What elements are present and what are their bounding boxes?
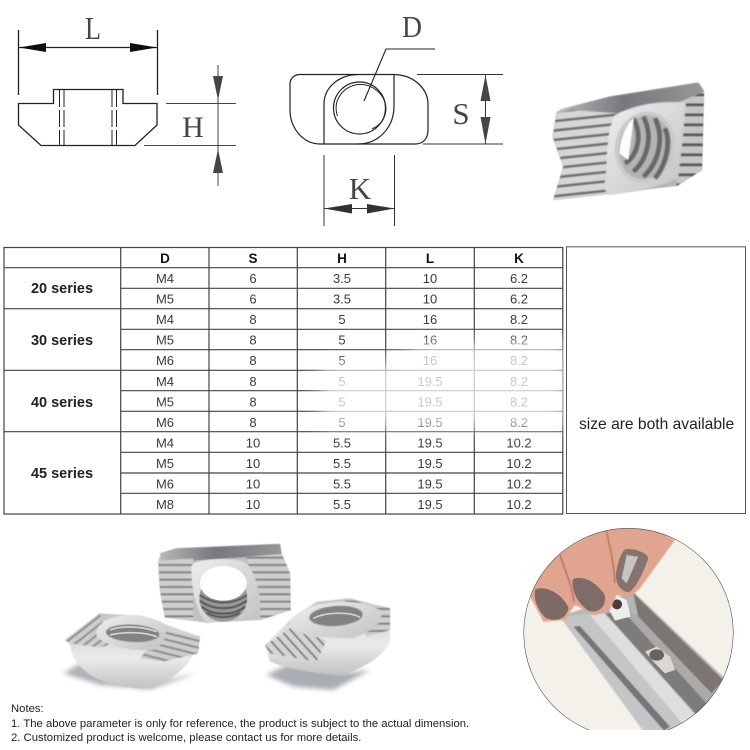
column L values: 10 (423, 271, 437, 286)
notes text block: 2. Customized product is welcome, please contact us for more details. (11, 732, 361, 744)
nut silhouette base (553, 83, 704, 200)
column K values: 10.2 (506, 436, 532, 450)
column K values: 10.2 (506, 476, 532, 492)
washed-out watermark area (320, 342, 566, 428)
table grid lines (4, 248, 563, 514)
series labels: 30 series (31, 333, 93, 349)
column D values: M4 (156, 312, 174, 327)
column D values: M5 (156, 456, 174, 471)
cast shadows (63, 663, 370, 690)
series labels: 40 series (31, 395, 93, 411)
column S values (246, 271, 260, 512)
dimension L: L (85, 10, 101, 46)
specification table (4, 248, 566, 514)
column H values: 5 (338, 312, 346, 327)
column S values: 10 (246, 476, 260, 492)
column K values (506, 271, 532, 512)
column S values: 6 (249, 271, 257, 286)
photo: single T-nut close-up (553, 83, 704, 200)
column L values: 16 (423, 353, 437, 368)
column L values: 19.5 (417, 415, 443, 430)
photo: fingers inserting T-nut in rail, circular crop (524, 528, 734, 730)
column D values: M6 (156, 353, 174, 368)
table header row: D (160, 251, 170, 266)
notes text block: Notes: (11, 703, 44, 715)
column K values: 10.2 (506, 456, 532, 471)
left nut (65, 613, 200, 688)
center flat plate (605, 102, 686, 195)
table header row: L (426, 251, 434, 266)
table header row: K (514, 251, 524, 266)
column S values: 8 (249, 332, 257, 348)
dimension S (417, 74, 503, 144)
nut left knurled flank (553, 110, 620, 200)
column H values: 5 (338, 394, 346, 410)
nut right knurled flank (673, 92, 704, 186)
column D values: M5 (156, 292, 174, 306)
column H values: 5 (338, 353, 346, 368)
column K values: 8.2 (510, 374, 528, 389)
column D values: M5 (156, 332, 174, 348)
centre boss (324, 74, 394, 144)
column L values: 19.5 (417, 394, 443, 410)
column H values: 3.5 (333, 292, 351, 306)
column K values: 8.2 (510, 312, 528, 327)
column H values: 5 (338, 332, 346, 348)
column K values: 6.2 (510, 292, 528, 306)
notes text block (11, 703, 469, 744)
column K values: 10.2 (506, 497, 532, 512)
side panel: size note (566, 247, 746, 514)
column S values: 8 (249, 312, 257, 327)
column L values: 10 (423, 292, 437, 306)
column H values (333, 271, 351, 512)
finger nails (535, 549, 648, 620)
table header row: S (248, 251, 258, 266)
T-nut seated in rail (645, 647, 675, 673)
column H values: 5 (338, 374, 346, 389)
top view outline (290, 74, 428, 144)
threaded hole (608, 106, 682, 189)
column L values: 19.5 (417, 436, 443, 450)
table header row (160, 251, 524, 266)
three fingers (527, 523, 675, 622)
aluminium rail (562, 593, 724, 730)
column S values: 8 (249, 374, 257, 389)
back nut (158, 544, 291, 623)
dimension K (324, 155, 394, 226)
nut top face (558, 83, 704, 115)
column D values: M4 (156, 436, 174, 450)
column L values: 19.5 (417, 497, 443, 512)
dimension D (364, 9, 435, 101)
T-nut held by fingers (609, 596, 630, 621)
column L values: 19.5 (417, 374, 443, 389)
column L values (417, 271, 443, 512)
column K values: 8.2 (510, 332, 528, 348)
hole rings (334, 82, 386, 134)
column K values: 6.2 (510, 271, 528, 286)
column D values: M6 (156, 415, 174, 430)
column L values: 16 (423, 312, 437, 327)
column K values: 8.2 (510, 353, 528, 368)
column D values: M4 (156, 271, 174, 286)
column L values: 19.5 (417, 456, 443, 471)
column H values: 5.5 (333, 476, 351, 492)
column H values: 5.5 (333, 497, 351, 512)
column S values: 6 (249, 292, 257, 306)
diagram: top view with D, S and K (290, 9, 503, 226)
column H values: 5 (338, 415, 346, 430)
column D values: M8 (156, 497, 174, 512)
column K values: 8.2 (510, 394, 528, 410)
dimension H (144, 65, 236, 186)
column H values: 3.5 (333, 271, 351, 286)
series labels (31, 281, 93, 482)
column D values: M6 (156, 476, 174, 492)
column K values: 8.2 (510, 415, 528, 430)
column S values: 8 (249, 394, 257, 410)
photo background (524, 538, 733, 730)
column S values: 8 (249, 415, 257, 430)
dimension S: S (452, 96, 470, 131)
column L values: 19.5 (417, 476, 443, 492)
side view outline (18, 90, 157, 146)
table header row: H (337, 251, 347, 266)
column S values: 10 (246, 456, 260, 471)
column D values: M4 (156, 374, 174, 389)
column S values: 10 (246, 436, 260, 450)
dimension H: H (182, 111, 204, 144)
column H values: 5.5 (333, 456, 351, 471)
column H values: 5.5 (333, 436, 351, 450)
column D values: M5 (156, 394, 174, 410)
photo: three T-nuts (63, 544, 390, 690)
thread hidden lines (60, 90, 116, 145)
notes text block: 1. The above parameter is only for reference, the product is subject to the actual dimension. (11, 718, 469, 730)
diagram: side view with L and H (18, 10, 236, 186)
column D values (156, 271, 174, 512)
column S values: 10 (246, 497, 260, 512)
column S values: 8 (249, 353, 257, 368)
dimension D: D (402, 9, 422, 44)
series labels: 45 series (31, 466, 93, 482)
dimension K: K (349, 171, 372, 206)
dimension L (18, 10, 158, 95)
side panel: size note: size are both available (579, 416, 734, 433)
series labels: 20 series (31, 281, 93, 297)
right nut (265, 598, 390, 675)
column L values: 16 (423, 332, 437, 348)
